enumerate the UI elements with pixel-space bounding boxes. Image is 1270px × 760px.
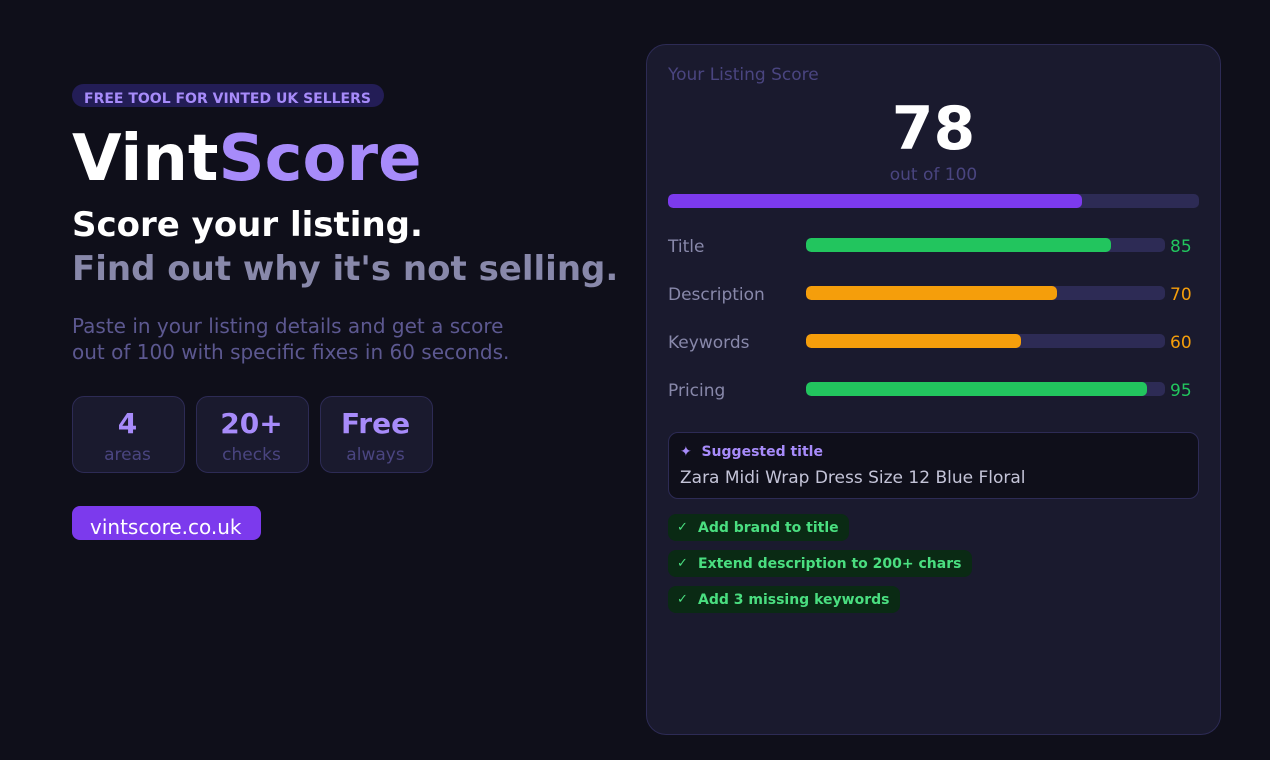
bar: title — [806, 238, 1165, 252]
stat: areas — [72, 396, 185, 473]
panel: listing score — [646, 44, 1221, 735]
website button — [72, 506, 261, 540]
fix: add keywords — [668, 586, 900, 613]
stat: areas: areas — [104, 445, 151, 465]
overall progress bar — [668, 194, 1199, 208]
stat: always free: Free — [341, 407, 410, 440]
headline: Score your listing. — [72, 205, 423, 245]
description — [72, 314, 509, 364]
overall score: 78 — [892, 94, 975, 164]
fix: add keywords: ✓ — [677, 592, 688, 607]
stat: always free — [320, 396, 433, 473]
label: pricing: Pricing — [668, 381, 725, 401]
badge — [72, 84, 384, 107]
badge text: FREE TOOL FOR VINTED UK SELLERS — [84, 91, 371, 107]
stat: checks: 20+ — [220, 407, 283, 440]
fix: extend description: ✓ — [677, 556, 688, 571]
score caption: out of 100 — [890, 165, 977, 185]
bar: pricing — [806, 382, 1165, 396]
stat: checks: checks — [222, 445, 281, 465]
headline: Find out why it's not selling. — [72, 249, 618, 289]
label: description: Description — [668, 285, 765, 305]
value: pricing: 95 — [1170, 381, 1192, 401]
suggested title text: Zara Midi Wrap Dress Size 12 Blue Floral — [680, 468, 1026, 488]
description: out of 100 with specific fixes in 60 seconds. — [72, 340, 509, 364]
value: keywords: 60 — [1170, 333, 1192, 353]
label: keywords: Keywords — [668, 333, 749, 353]
stat: checks — [196, 396, 309, 473]
fix: add brand: Add brand to title — [698, 520, 839, 536]
fix: add brand — [668, 514, 849, 541]
label: title: Title — [668, 237, 704, 257]
bar: keywords — [806, 334, 1165, 348]
headline — [72, 205, 618, 289]
value: description: 70 — [1170, 285, 1192, 305]
suggested title label: ✦ Suggested title — [680, 444, 823, 460]
panel heading: Your Listing Score — [668, 65, 819, 85]
title: VintScore — [72, 122, 421, 196]
stat: areas: 4 — [118, 407, 137, 440]
fix: add keywords: Add 3 missing keywords — [698, 592, 889, 608]
fix: extend description: Extend description to 200+ chars — [698, 556, 961, 572]
description: Paste in your listing details and get a score — [72, 314, 503, 338]
suggested title box — [668, 432, 1199, 499]
fix: extend description — [668, 550, 972, 577]
fix: add brand: ✓ — [677, 520, 688, 535]
bar: description — [806, 286, 1165, 300]
stat: always free: always — [346, 445, 405, 465]
value: title: 85 — [1170, 237, 1192, 257]
website url: vintscore.co.uk — [90, 515, 242, 539]
